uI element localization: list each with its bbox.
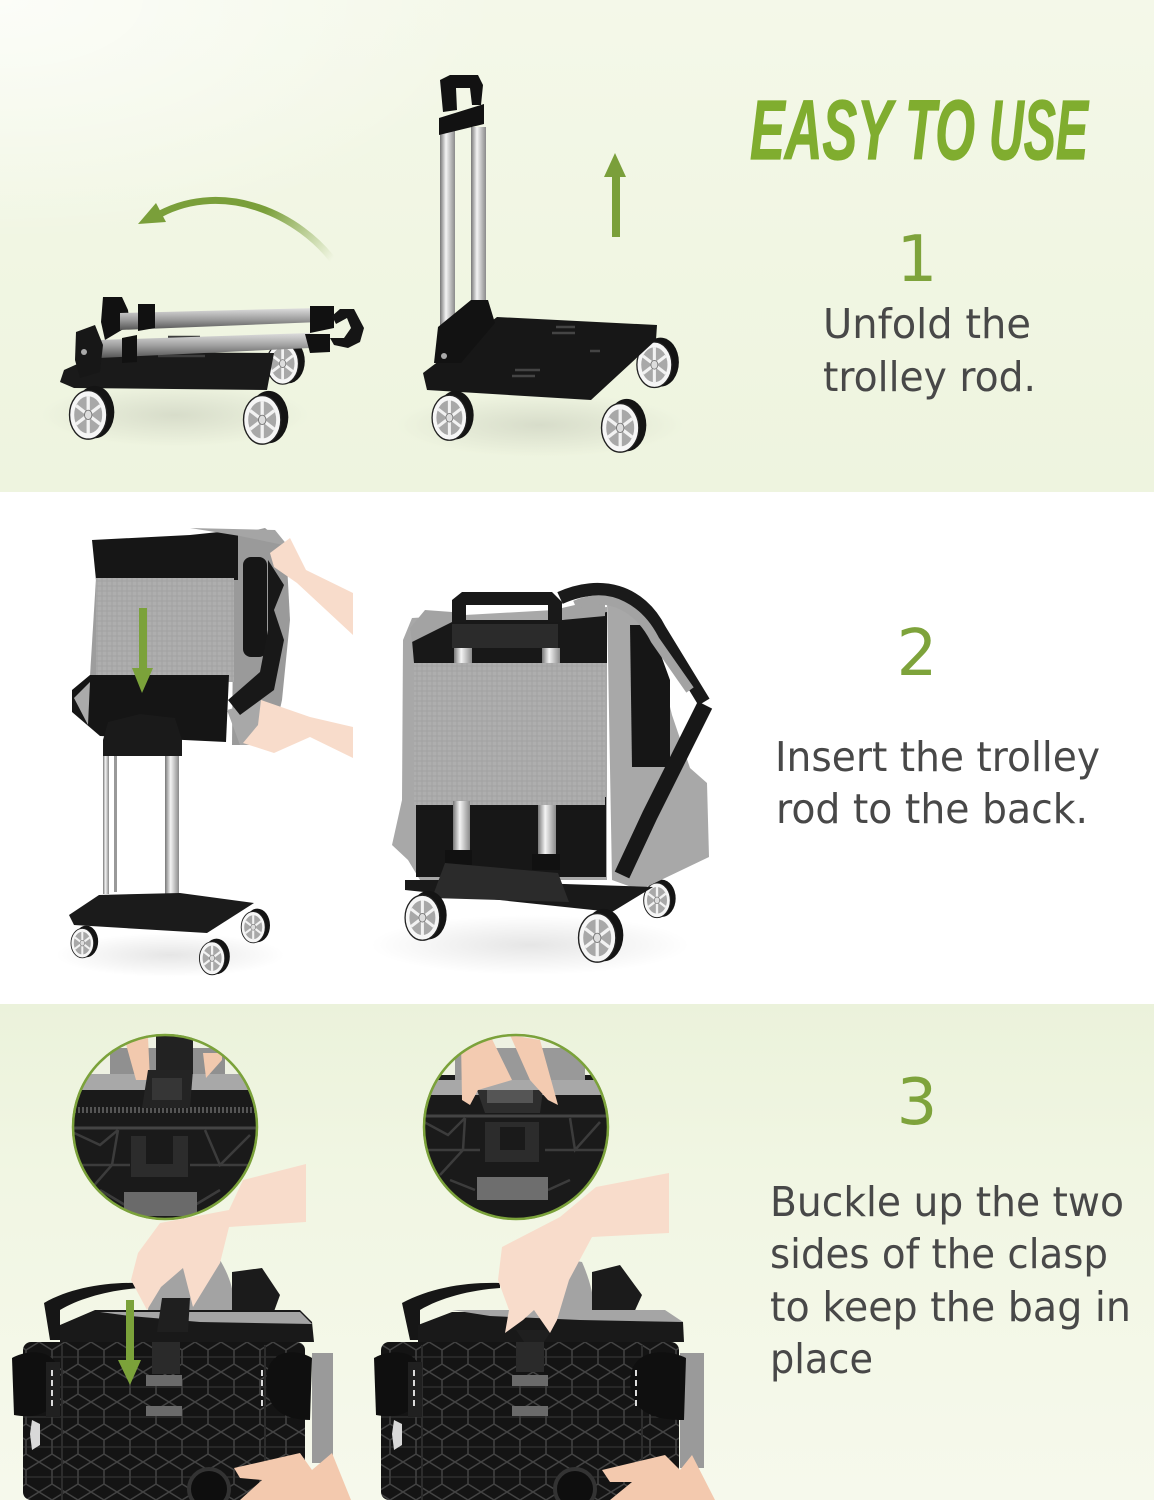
step 2 number: 2 <box>897 617 937 691</box>
step 3 text: place <box>770 1335 873 1383</box>
step 1 text: Unfold the <box>823 300 1031 348</box>
hands <box>243 538 353 758</box>
close-up circle: clasp closed <box>422 1034 610 1220</box>
panel: step 3 background <box>0 1004 1154 1500</box>
arrow: up <box>604 153 626 237</box>
step 2 text: rod to the back. <box>776 785 1088 833</box>
arrow: curved unfold <box>138 200 335 263</box>
title: TO <box>905 83 975 177</box>
step 2 text <box>775 733 1100 833</box>
step 3 text: Buckle up the two <box>770 1178 1124 1226</box>
bag underside left <box>12 1164 351 1500</box>
hand on clasp <box>498 1173 669 1333</box>
title: EASY <box>750 83 896 177</box>
hand lower right <box>602 1455 715 1500</box>
step 1 text: trolley rod. <box>823 353 1036 401</box>
unfolded trolley <box>395 75 685 457</box>
hand lower right <box>234 1453 351 1500</box>
trolley rod handle on bag <box>452 592 562 622</box>
backpack attached to trolley <box>370 589 709 975</box>
step 3 text <box>770 1178 1131 1383</box>
step 2 text: Insert the trolley <box>775 733 1100 781</box>
hand on clasp <box>131 1164 306 1310</box>
panel: step 1 background <box>0 0 1154 492</box>
title <box>750 83 1090 177</box>
panel: step 2 background <box>0 492 1154 1004</box>
arrow: down into bag <box>132 608 153 693</box>
backpack being lowered onto trolley <box>55 528 353 977</box>
folded trolley <box>40 297 364 447</box>
green down arrow <box>118 1300 141 1385</box>
step 1 text <box>823 300 1036 401</box>
close-up circle: clasp open <box>70 1030 260 1230</box>
step 3 text: sides of the clasp <box>770 1230 1108 1278</box>
bag underside right <box>374 1173 715 1500</box>
step 3 text: to keep the bag in <box>770 1283 1131 1331</box>
step 1 number: 1 <box>897 223 937 297</box>
trolley handle <box>103 714 182 756</box>
step 3 number: 3 <box>897 1066 937 1140</box>
